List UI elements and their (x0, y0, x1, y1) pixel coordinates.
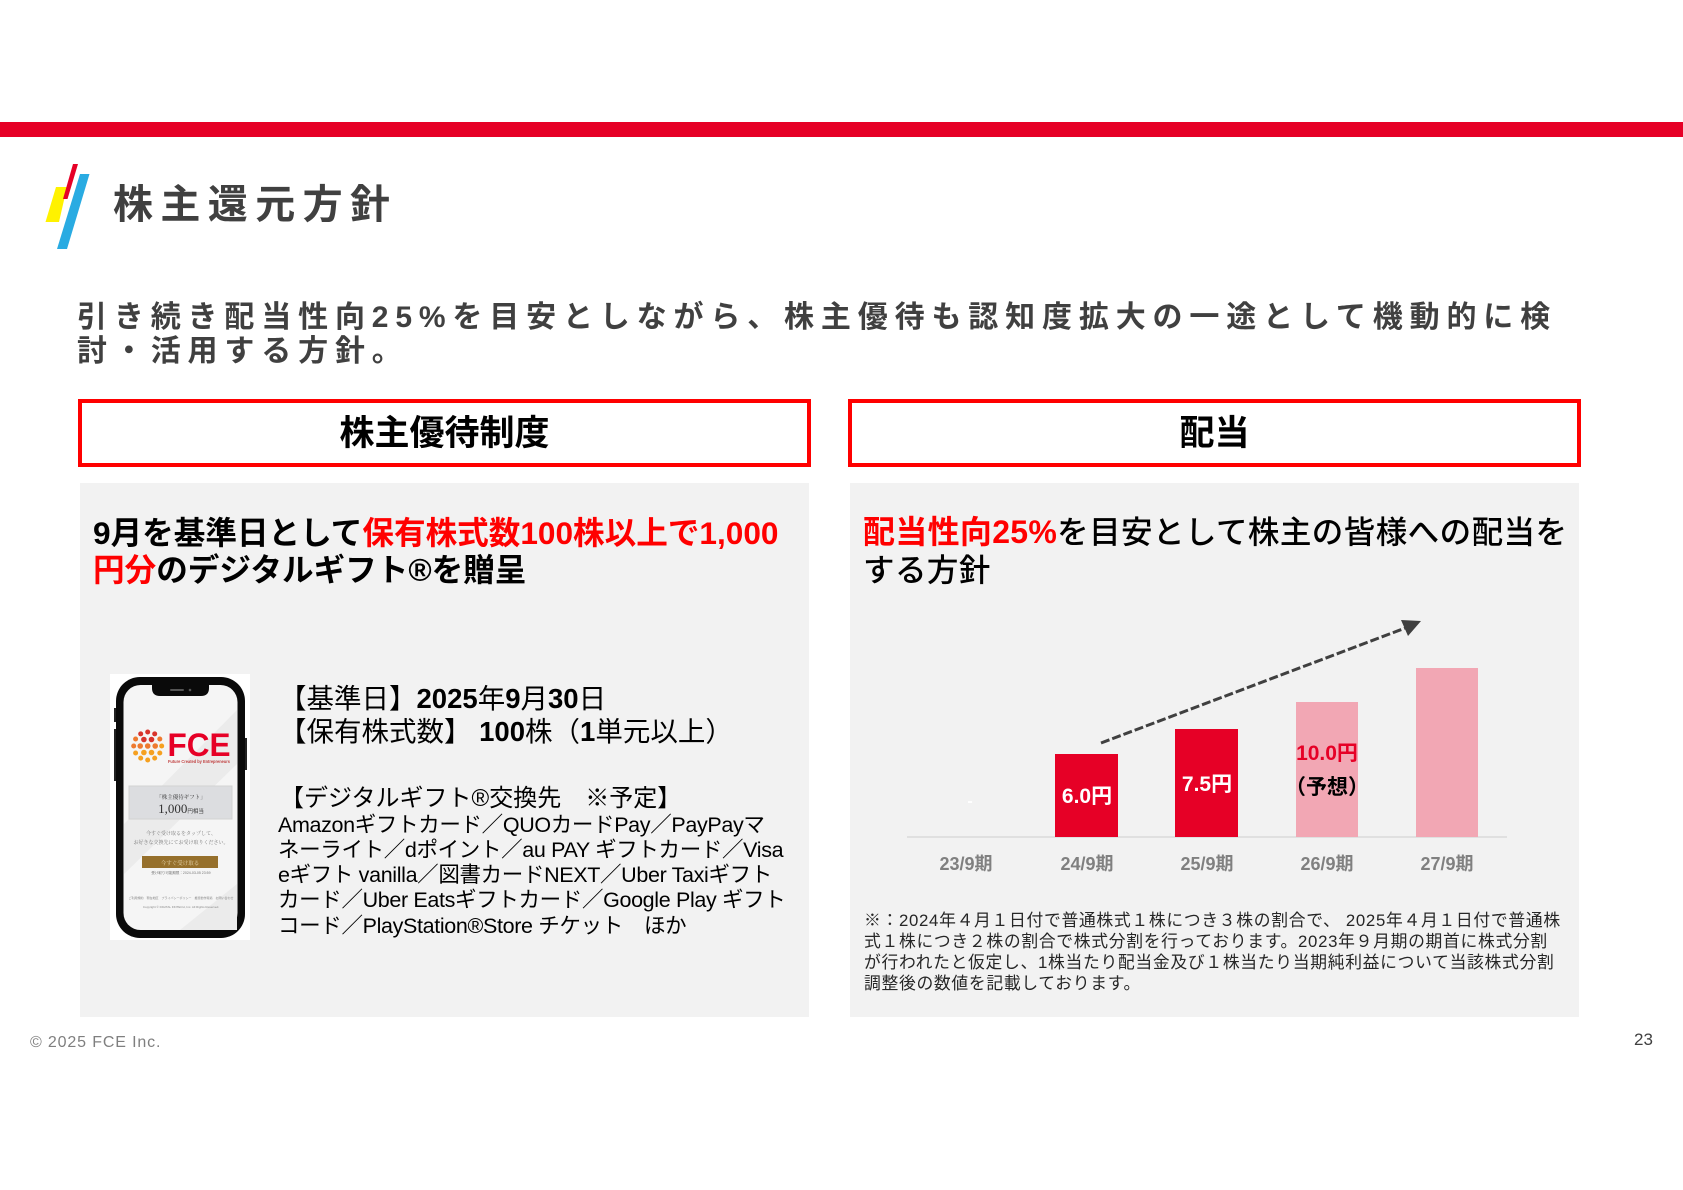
gift exchange list: ネーライト／dポイント／au PAY ギフトカード／Visa (278, 838, 783, 862)
bar value labels: （予想） (1285, 776, 1369, 799)
record date and holding requirement (279, 683, 733, 747)
benefits headline: 9月を基準日として保有株式数100株以上で1,000 (93, 515, 778, 551)
title: 株主還元方針 (113, 183, 397, 227)
FCE logo stars (131, 730, 164, 762)
phone illustration: Copyright © DIGITAL FINTECH, Inc. All Rights Reserved. (143, 905, 219, 909)
gift exchange list: コード／PlayStation®Store チケット ほか (278, 914, 686, 938)
gift exchange list: カード／Uber Eatsギフトカード／Google Play ギフト (278, 888, 785, 912)
bars (1055, 668, 1478, 837)
phone illustration (110, 674, 250, 940)
category labels: 24/9期 (1060, 854, 1114, 874)
record date and holding requirement: 【保有株式数】 100株（1単元以上） (279, 716, 733, 747)
empty value marker: - (967, 793, 973, 810)
dividend headline: する方針 (863, 552, 991, 588)
footnote: 調整後の数値を記載しております。 (864, 974, 1141, 993)
phone illustration: 今すぐ受け取るをタップして、 (146, 830, 216, 837)
bar value labels: 10.0円 (1296, 742, 1358, 765)
axis baseline (907, 836, 1507, 838)
phone illustration: 1,000円相当 (158, 801, 204, 816)
phone illustration: FCE (168, 727, 230, 763)
bar value labels (1062, 742, 1369, 808)
phone illustration: 今すぐ受け取る (161, 859, 199, 867)
gift exchange list: 【デジタルギフト®交換先 ※予定】 (280, 785, 681, 812)
benefits headline (93, 515, 778, 588)
panel: dividend (850, 483, 1579, 1017)
copyright: © 2025 FCE Inc. (30, 1034, 161, 1051)
phone illustration: ご利用規約 現在地区 プライバシーポリシー 推奨動作環境 お問い合わせ (129, 895, 233, 900)
heading box: dividend: 配当 (1179, 414, 1250, 453)
phone illustration: 受け取り可能期限：2024-03-05 23:59 (151, 870, 211, 875)
dividend bar chart (907, 620, 1507, 874)
footnote: 式１株につき２株の割合で株式分割を行っております。2023年９月期の期首に株式分割 (864, 932, 1548, 951)
trend arrow (1101, 620, 1421, 743)
category labels: 23/9期 (939, 854, 993, 874)
record date and holding requirement: 【基準日】2025年9月30日 (279, 683, 606, 714)
logo mark (46, 164, 90, 249)
bar value labels: 6.0円 (1062, 785, 1112, 808)
bar value labels: 7.5円 (1182, 773, 1232, 796)
lead message: 引き続き配当性向25%を目安としながら、株主優待も認知度拡大の一途として機動的に検 (77, 301, 1557, 334)
footnote: が行われたと仮定し、1株当たり配当金及び１株当たり当期純利益について当該株式分割 (864, 953, 1554, 972)
page number: 23 (1634, 1030, 1653, 1049)
lead message: 討・活用する方針。 (77, 335, 409, 368)
panel: shareholder benefits (80, 483, 809, 1017)
heading box: dividend (848, 399, 1581, 467)
phone illustration: 「株主優待ギフト」 (156, 793, 206, 801)
category labels: 26/9期 (1300, 854, 1354, 874)
footnote: ※：2024年４月１日付で普通株式１株につき３株の割合で、 2025年４月１日付で普通株 (864, 911, 1561, 930)
gift exchange list (278, 785, 785, 938)
category labels: 25/9期 (1180, 854, 1234, 874)
lead message (77, 300, 1557, 368)
phone illustration: お好きな交換先にてお受け取りください。 (133, 839, 229, 846)
category labels (939, 854, 1474, 874)
footnote (864, 911, 1561, 993)
benefits headline: 円分のデジタルギフト®を贈呈 (93, 552, 526, 588)
gift exchange list: Amazonギフトカード／QUOカードPay／PayPayマ (278, 813, 764, 837)
heading box: shareholder benefits: 株主優待制度 (339, 414, 550, 453)
heading box: shareholder benefits (78, 399, 811, 467)
gift exchange list: eギフト vanilla／図書カードNEXT／Uber Taxiギフト (278, 863, 772, 887)
phone illustration: Future Created by Entrepreneurs (168, 759, 230, 764)
dividend headline: 配当性向25%を目安として株主の皆様への配当を (863, 514, 1567, 550)
top red band (0, 122, 1683, 137)
category labels: 27/9期 (1420, 854, 1474, 874)
dividend headline (863, 514, 1567, 588)
